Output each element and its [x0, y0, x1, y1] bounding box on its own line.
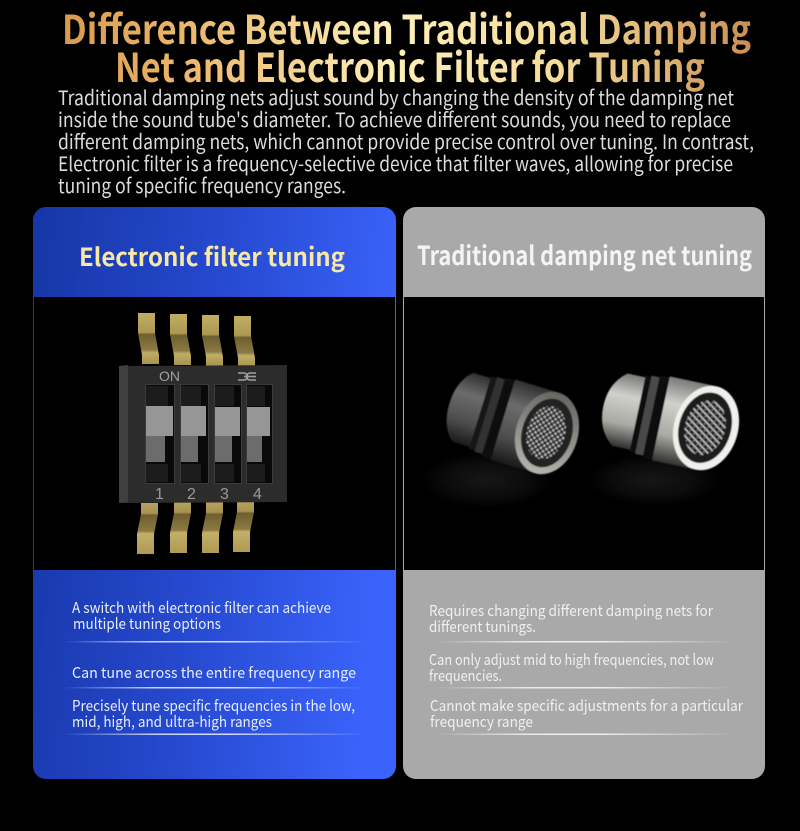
icon: switch body: ON: [159, 368, 180, 384]
panel: electronic filter tuning: [33, 207, 396, 779]
icon: light damping net: [594, 362, 750, 480]
switch numbers: 2: [187, 486, 196, 503]
icon: bottom gold leads: [137, 501, 254, 554]
icon: brand mark: [238, 373, 256, 380]
switch numbers: 3: [220, 486, 229, 503]
switch slot 2: [180, 384, 208, 484]
title: Net and Electronic Filter for Tuning: [115, 36, 705, 94]
reflections: [421, 452, 720, 508]
image area: DIP switch: [34, 297, 395, 570]
switch slot 3: [214, 384, 242, 484]
intro text block: [58, 82, 754, 199]
panel background: grey: [403, 207, 765, 779]
feature list: damping net: frequencies.: [429, 665, 502, 686]
title: [62, 0, 751, 94]
feature list: damping net: [429, 600, 743, 735]
feature list: electronic filter: multiple tuning options: [73, 613, 221, 634]
feature list: damping net: frequency range: [430, 711, 533, 732]
panel: traditional damping net tuning: [403, 207, 765, 779]
switch numbers: [155, 486, 262, 503]
feature list: damping net: Cannot make specific adjustments for a particular: [430, 695, 743, 716]
feature list: electronic filter: mid, high, and ultra-high ranges: [72, 711, 272, 732]
feature list: damping net: Requires changing different damping nets for: [429, 600, 713, 621]
image area: damping nets: [404, 297, 764, 570]
icon: top gold leads: [138, 313, 255, 367]
intro text block: inside the sound tube's diameter. To achieve different sounds, you need to replace: [58, 104, 731, 133]
switch numbers: 1: [155, 486, 164, 503]
switch numbers: 4: [253, 486, 262, 503]
intro text block: tuning of specific frequency ranges.: [58, 170, 346, 199]
panel background: blue: [33, 207, 396, 779]
feature list: electronic filter: [63, 597, 367, 735]
feature list: electronic filter: A switch with electronic filter can achieve: [72, 597, 331, 618]
switch slot 1: [146, 384, 174, 484]
feature list: electronic filter: Precisely tune specific frequencies in the low,: [72, 695, 355, 716]
icon: dark damping net: [437, 363, 589, 482]
switch slot 4: [246, 384, 272, 484]
icon: switch body: [119, 365, 287, 503]
feature list: damping net: Can only adjust mid to high frequencies, not low: [429, 649, 714, 670]
feature list: damping net: different tunings.: [429, 616, 536, 637]
feature list: electronic filter: Can tune across the entire frequency range: [72, 662, 356, 683]
heading: electronic filter tuning: Electronic filter tuning: [79, 238, 345, 274]
